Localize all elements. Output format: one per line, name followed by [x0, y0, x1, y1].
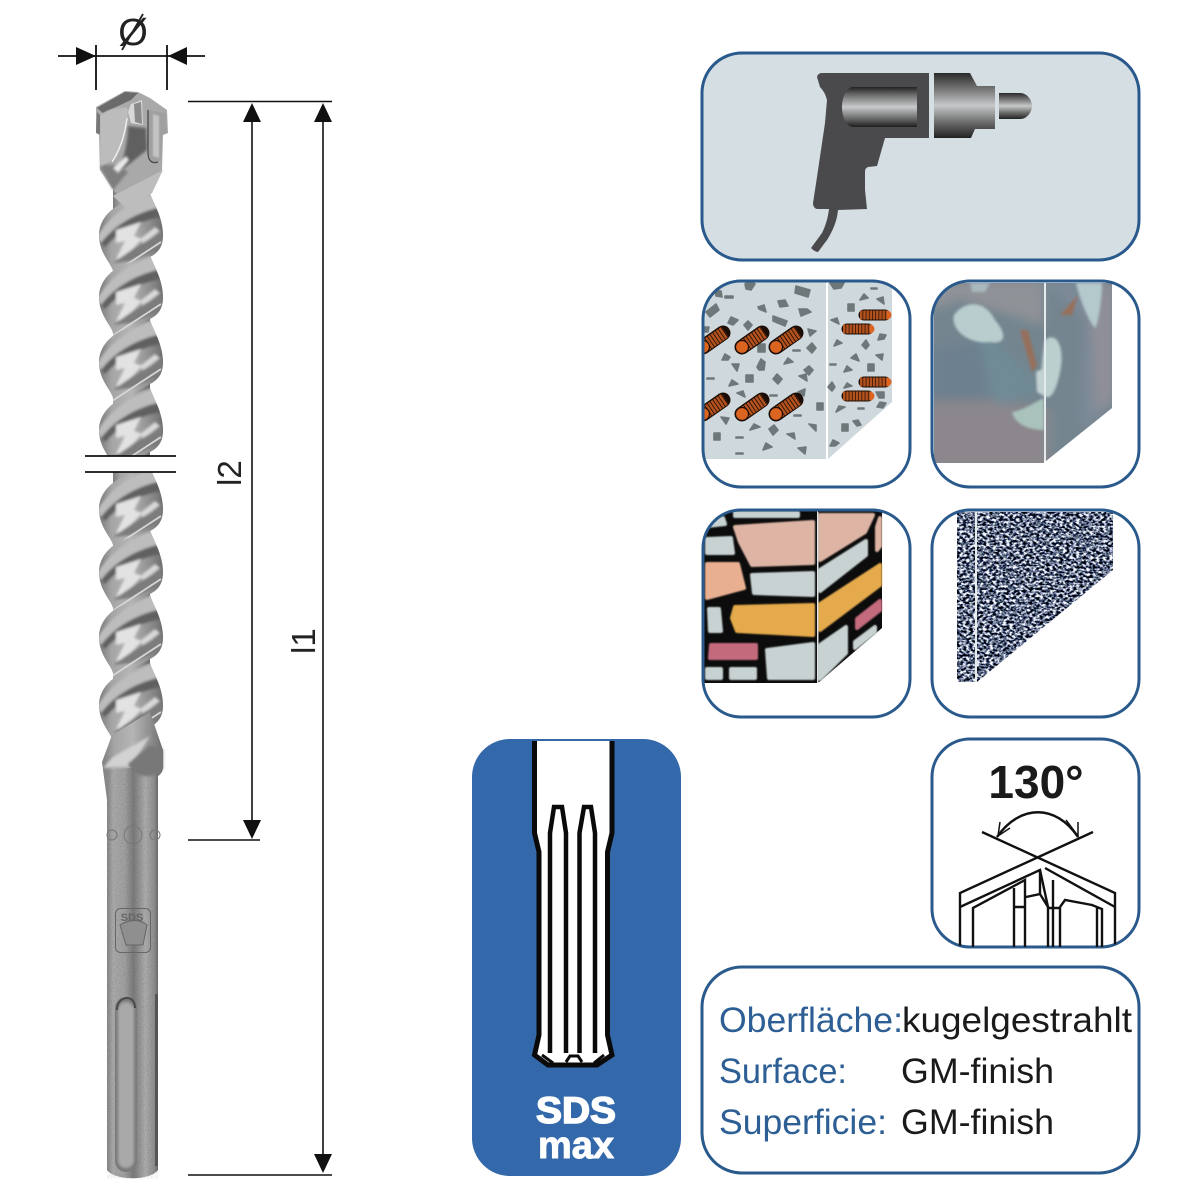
dimension: diameter	[58, 12, 205, 90]
marble block	[934, 283, 1112, 463]
panel: granite	[932, 510, 1139, 717]
rebar, side face	[843, 310, 892, 400]
text: Oberfläche row: Oberfläche:	[719, 1001, 903, 1040]
dimension: l2	[188, 102, 332, 840]
text: Surface row	[719, 1052, 1054, 1091]
panel: surface finish	[702, 967, 1139, 1173]
icon: spindle	[999, 93, 1032, 119]
text: Oberfläche row	[719, 1001, 1132, 1040]
label: SDS: SDS	[536, 1090, 616, 1131]
icon: shank outline	[534, 741, 612, 1065]
bit: shoulder	[102, 712, 163, 800]
bit: cut gap	[85, 456, 176, 472]
brick wall block	[700, 510, 882, 683]
icon: drill motor	[842, 87, 917, 127]
bit: upper flutes	[97, 193, 163, 473]
bit: shaft	[103, 736, 163, 1178]
label: 130°: 130°	[988, 756, 1084, 808]
dimension: diameter: Ø	[118, 12, 148, 54]
panel: 130 degree point angle	[932, 739, 1139, 947]
rebar, front face	[696, 332, 798, 420]
concrete block	[696, 280, 892, 459]
panel: concrete	[696, 280, 910, 487]
drill bit	[85, 91, 176, 1178]
label: max: max	[538, 1125, 614, 1167]
text: Superficie row: GM-finish	[901, 1103, 1054, 1142]
panel: natural stone	[925, 280, 1139, 487]
dimension: l1: l1	[285, 628, 322, 654]
text: Oberfläche row: kugelgestrahlt	[902, 1001, 1132, 1040]
icon: drill body	[811, 73, 929, 252]
panel: hammer drill	[702, 53, 1139, 260]
bit: lower flutes	[97, 467, 163, 748]
text: Surface row: GM-finish	[901, 1052, 1054, 1091]
bit: spiral neck	[113, 185, 150, 775]
text: Surface row: Surface:	[719, 1052, 847, 1091]
text: Superficie row	[719, 1103, 1054, 1142]
panel: SDS max shank	[472, 739, 681, 1176]
bit: carbide head	[96, 91, 168, 210]
dimension: l2: l2	[211, 460, 248, 486]
text: Superficie row: Superficie:	[719, 1103, 887, 1142]
dimension: l1	[188, 103, 332, 1175]
granite block	[955, 510, 1115, 685]
panel: masonry	[700, 510, 910, 717]
bit: shaft: SDS	[121, 912, 143, 924]
icon: angle lines and tip	[960, 812, 1115, 947]
icon: chuck	[934, 73, 995, 138]
break lines	[85, 456, 176, 472]
